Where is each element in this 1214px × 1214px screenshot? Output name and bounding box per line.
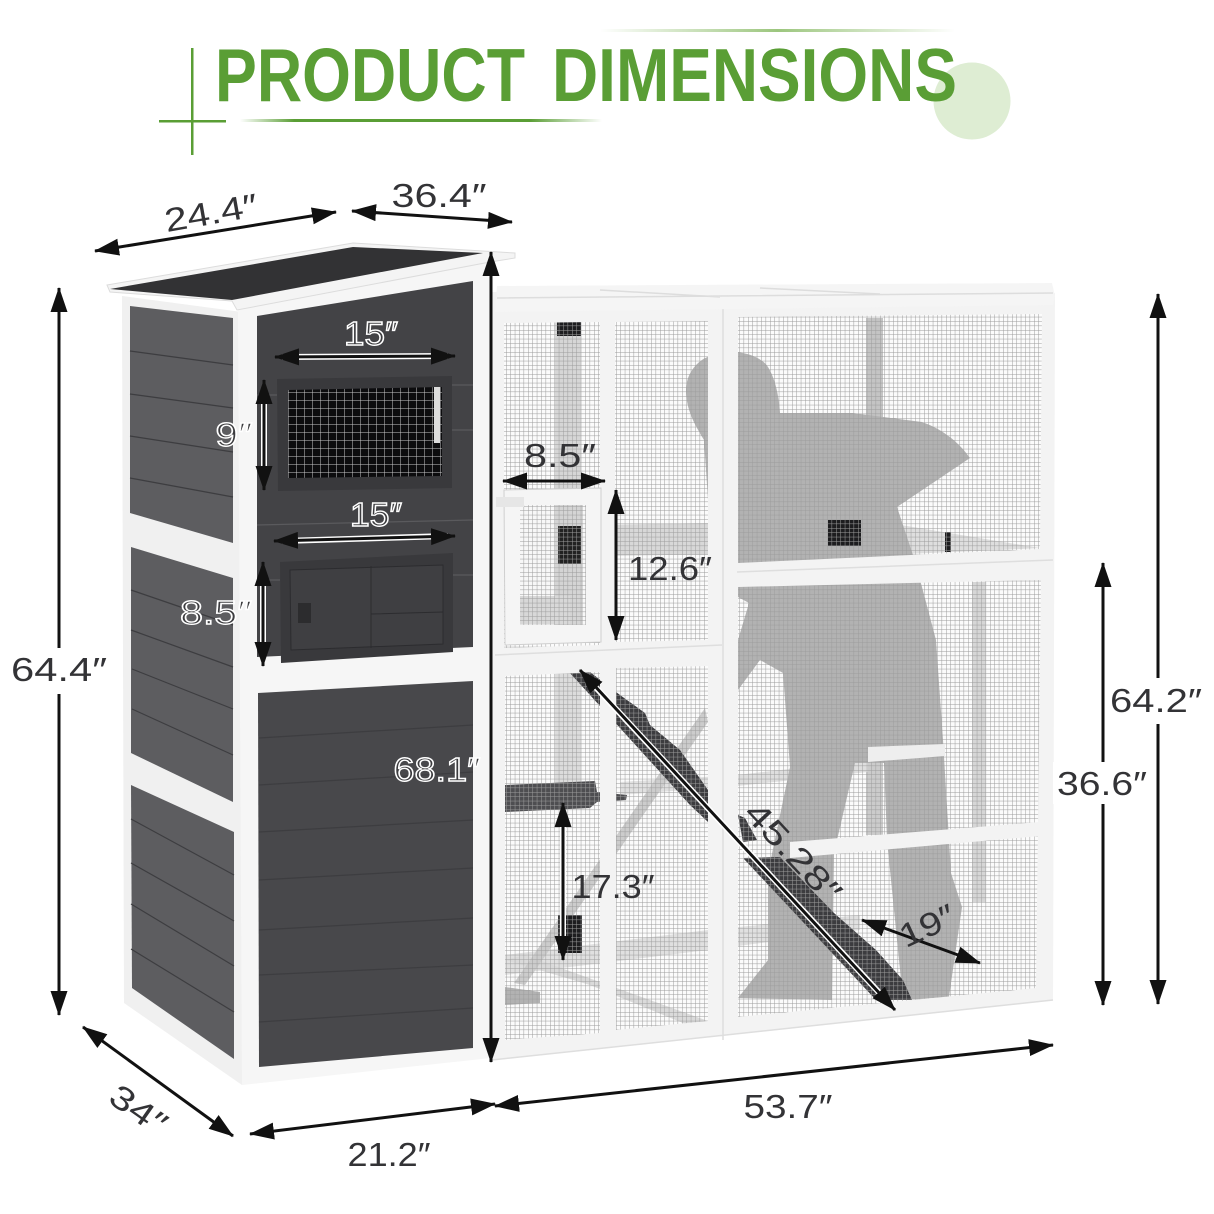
lower cross band <box>790 822 1040 858</box>
arrow: 45.28 ramp length <box>580 670 895 1010</box>
arrow: 9 window height <box>216 380 264 490</box>
arrow: 36.4 depth: 36.4″ <box>392 177 487 214</box>
panel: cage run with mesh <box>492 283 1055 1060</box>
arrow: 21.2 base <box>250 1104 495 1173</box>
arrow: 53.7 base <box>495 1045 1053 1125</box>
arrow: 8.5 cat door width <box>503 437 605 481</box>
arrow: 21.2 base: 21.2″ <box>348 1136 431 1173</box>
arrow: 68.1 overall: 68.1″ <box>394 751 481 788</box>
arrow: 24.4 width <box>95 186 336 251</box>
black mesh squares <box>557 322 951 953</box>
white wooden frame <box>492 292 1055 1060</box>
small cat door <box>496 488 601 645</box>
silhouette of person for scale <box>686 352 970 1000</box>
panel: cottage front wall <box>238 260 491 1085</box>
arrow: 15 door width <box>274 496 455 541</box>
wire mesh <box>500 310 1050 1055</box>
arrow: 34 base depth <box>83 1027 233 1143</box>
arrow: 9 window height: 9″ <box>216 416 253 453</box>
arrow: 64.2 height: 64.2″ <box>1110 682 1202 719</box>
staircase ramp <box>570 672 912 1000</box>
arrow: 24.4 width: 24.4″ <box>162 186 261 239</box>
arrow: 19 ramp width <box>862 896 980 963</box>
perch shelf <box>505 781 627 812</box>
title: product dimensions: DIMENSIONS <box>552 33 957 117</box>
panel: cottage side wall <box>122 296 242 1085</box>
arrow: 34 base depth: 34″ <box>103 1077 175 1143</box>
arrow: 64.2 height <box>1104 294 1210 1004</box>
arrow: 19 ramp width: 19″ <box>893 896 962 955</box>
arrow: 8.5 cat door width: 8.5″ <box>524 437 596 474</box>
arrow: 45.28 ramp length: 45.28″ <box>737 794 850 911</box>
roof <box>107 243 515 310</box>
arrow: 53.7 base: 53.7″ <box>744 1088 833 1125</box>
arrow: 36.6 height: 36.6″ <box>1057 765 1147 802</box>
icon: sliding door <box>280 553 453 663</box>
arrow: 36.4 depth <box>352 177 512 222</box>
icon: wire window <box>277 376 452 491</box>
arrow: 17.3 shelf height: 17.3″ <box>572 868 655 905</box>
arrow: 64.4 height <box>5 288 113 1015</box>
arrow: 15 window width: 15″ <box>344 315 398 352</box>
lower door <box>258 681 473 1067</box>
title: product dimensions <box>159 29 1010 155</box>
arrow: 15 door width: 15″ <box>350 496 402 533</box>
frame edges <box>492 305 1053 1060</box>
arrow: 8.5 door height <box>180 562 263 666</box>
arrow: 8.5 door height: 8.5″ <box>180 594 252 631</box>
back posts and rails <box>505 318 1040 1030</box>
arrow: 64.4 height: 64.4″ <box>11 651 107 688</box>
title: product dimensions: PRODUCT <box>215 33 525 117</box>
arrow: 36.6 height <box>1053 563 1151 1005</box>
arrow: 12.6 cat door height: 12.6″ <box>628 550 712 587</box>
roof rails <box>495 283 1055 312</box>
